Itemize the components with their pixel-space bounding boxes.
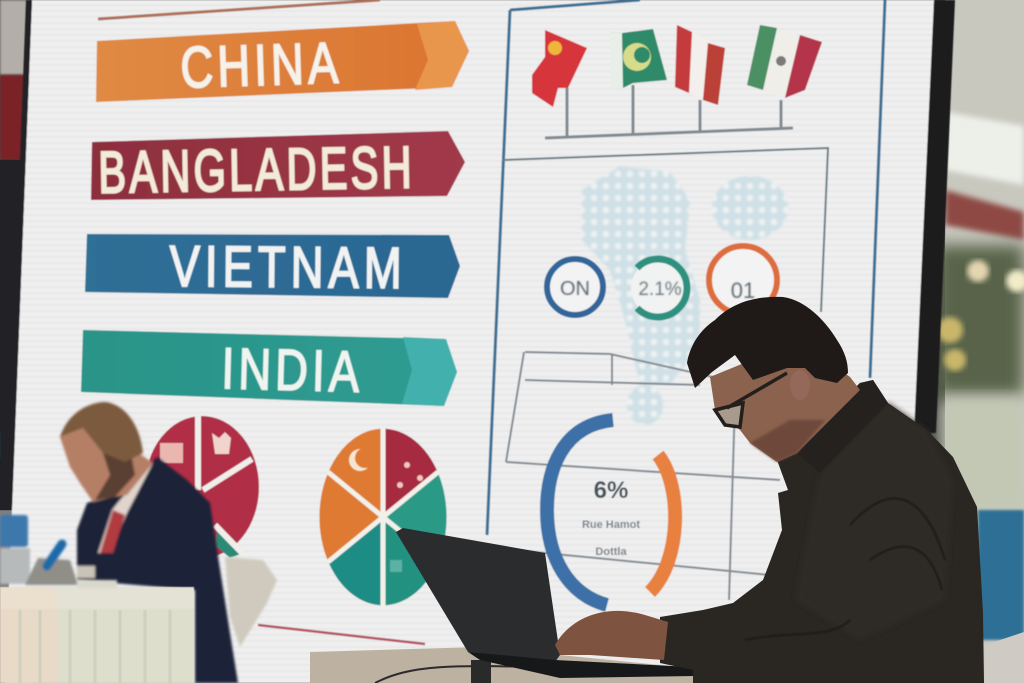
jaw shadow xyxy=(750,420,825,462)
laptop xyxy=(396,528,695,678)
left table with microphone xyxy=(0,515,194,683)
dotted world map xyxy=(582,166,788,425)
man on left with suit xyxy=(60,402,238,683)
glasses xyxy=(715,373,787,427)
hand and cuff xyxy=(77,566,95,578)
banner: Vietnam xyxy=(85,234,460,301)
donut chart xyxy=(547,420,675,605)
hair xyxy=(687,297,848,388)
collar xyxy=(797,380,888,473)
chair behind left man xyxy=(225,557,277,647)
banner: China xyxy=(96,21,469,102)
map panel xyxy=(503,148,828,425)
donut chart: Dottla xyxy=(595,546,627,558)
donut chart: 6% xyxy=(594,477,628,504)
flag: Pakistan xyxy=(610,29,667,88)
pie icon: right xyxy=(319,427,447,607)
man in black jacket xyxy=(555,297,984,683)
jacket shading xyxy=(795,403,953,640)
left color arrow banners xyxy=(81,21,469,406)
suit torso xyxy=(77,457,238,683)
ring stat: blue xyxy=(547,259,603,315)
banner: Vietnam: VIETNAM xyxy=(169,235,407,301)
ear xyxy=(790,370,810,400)
white table xyxy=(0,587,194,683)
ring stat: teal xyxy=(631,259,689,317)
banner: Bangladesh: BANGLADESH xyxy=(98,134,415,206)
ring stat: orange xyxy=(709,246,777,314)
banner: India xyxy=(81,330,457,406)
banner: India: INDIA xyxy=(221,337,364,405)
hands xyxy=(555,611,668,660)
flag poles and base xyxy=(545,85,793,138)
lower chart panel xyxy=(506,352,780,605)
ring stat: orange: 01 xyxy=(731,278,755,303)
foreground desk xyxy=(310,647,840,683)
pie icon: left xyxy=(145,414,259,558)
sleeve folds xyxy=(745,499,945,640)
flag: red and white stripes xyxy=(675,25,725,105)
ring stat: teal: 2.1% xyxy=(638,279,682,300)
jacket xyxy=(660,380,984,683)
flag: China xyxy=(532,30,587,107)
head xyxy=(60,428,153,502)
water bottles and mic xyxy=(0,515,117,588)
banner: China: CHINA xyxy=(180,31,343,101)
flag: Mexico xyxy=(747,25,822,98)
donut chart: Rue Hamot xyxy=(582,519,640,531)
flags row xyxy=(532,25,822,138)
ring stat: blue: ON xyxy=(560,278,590,300)
right panel frame xyxy=(487,0,885,535)
neck and face xyxy=(710,340,860,462)
